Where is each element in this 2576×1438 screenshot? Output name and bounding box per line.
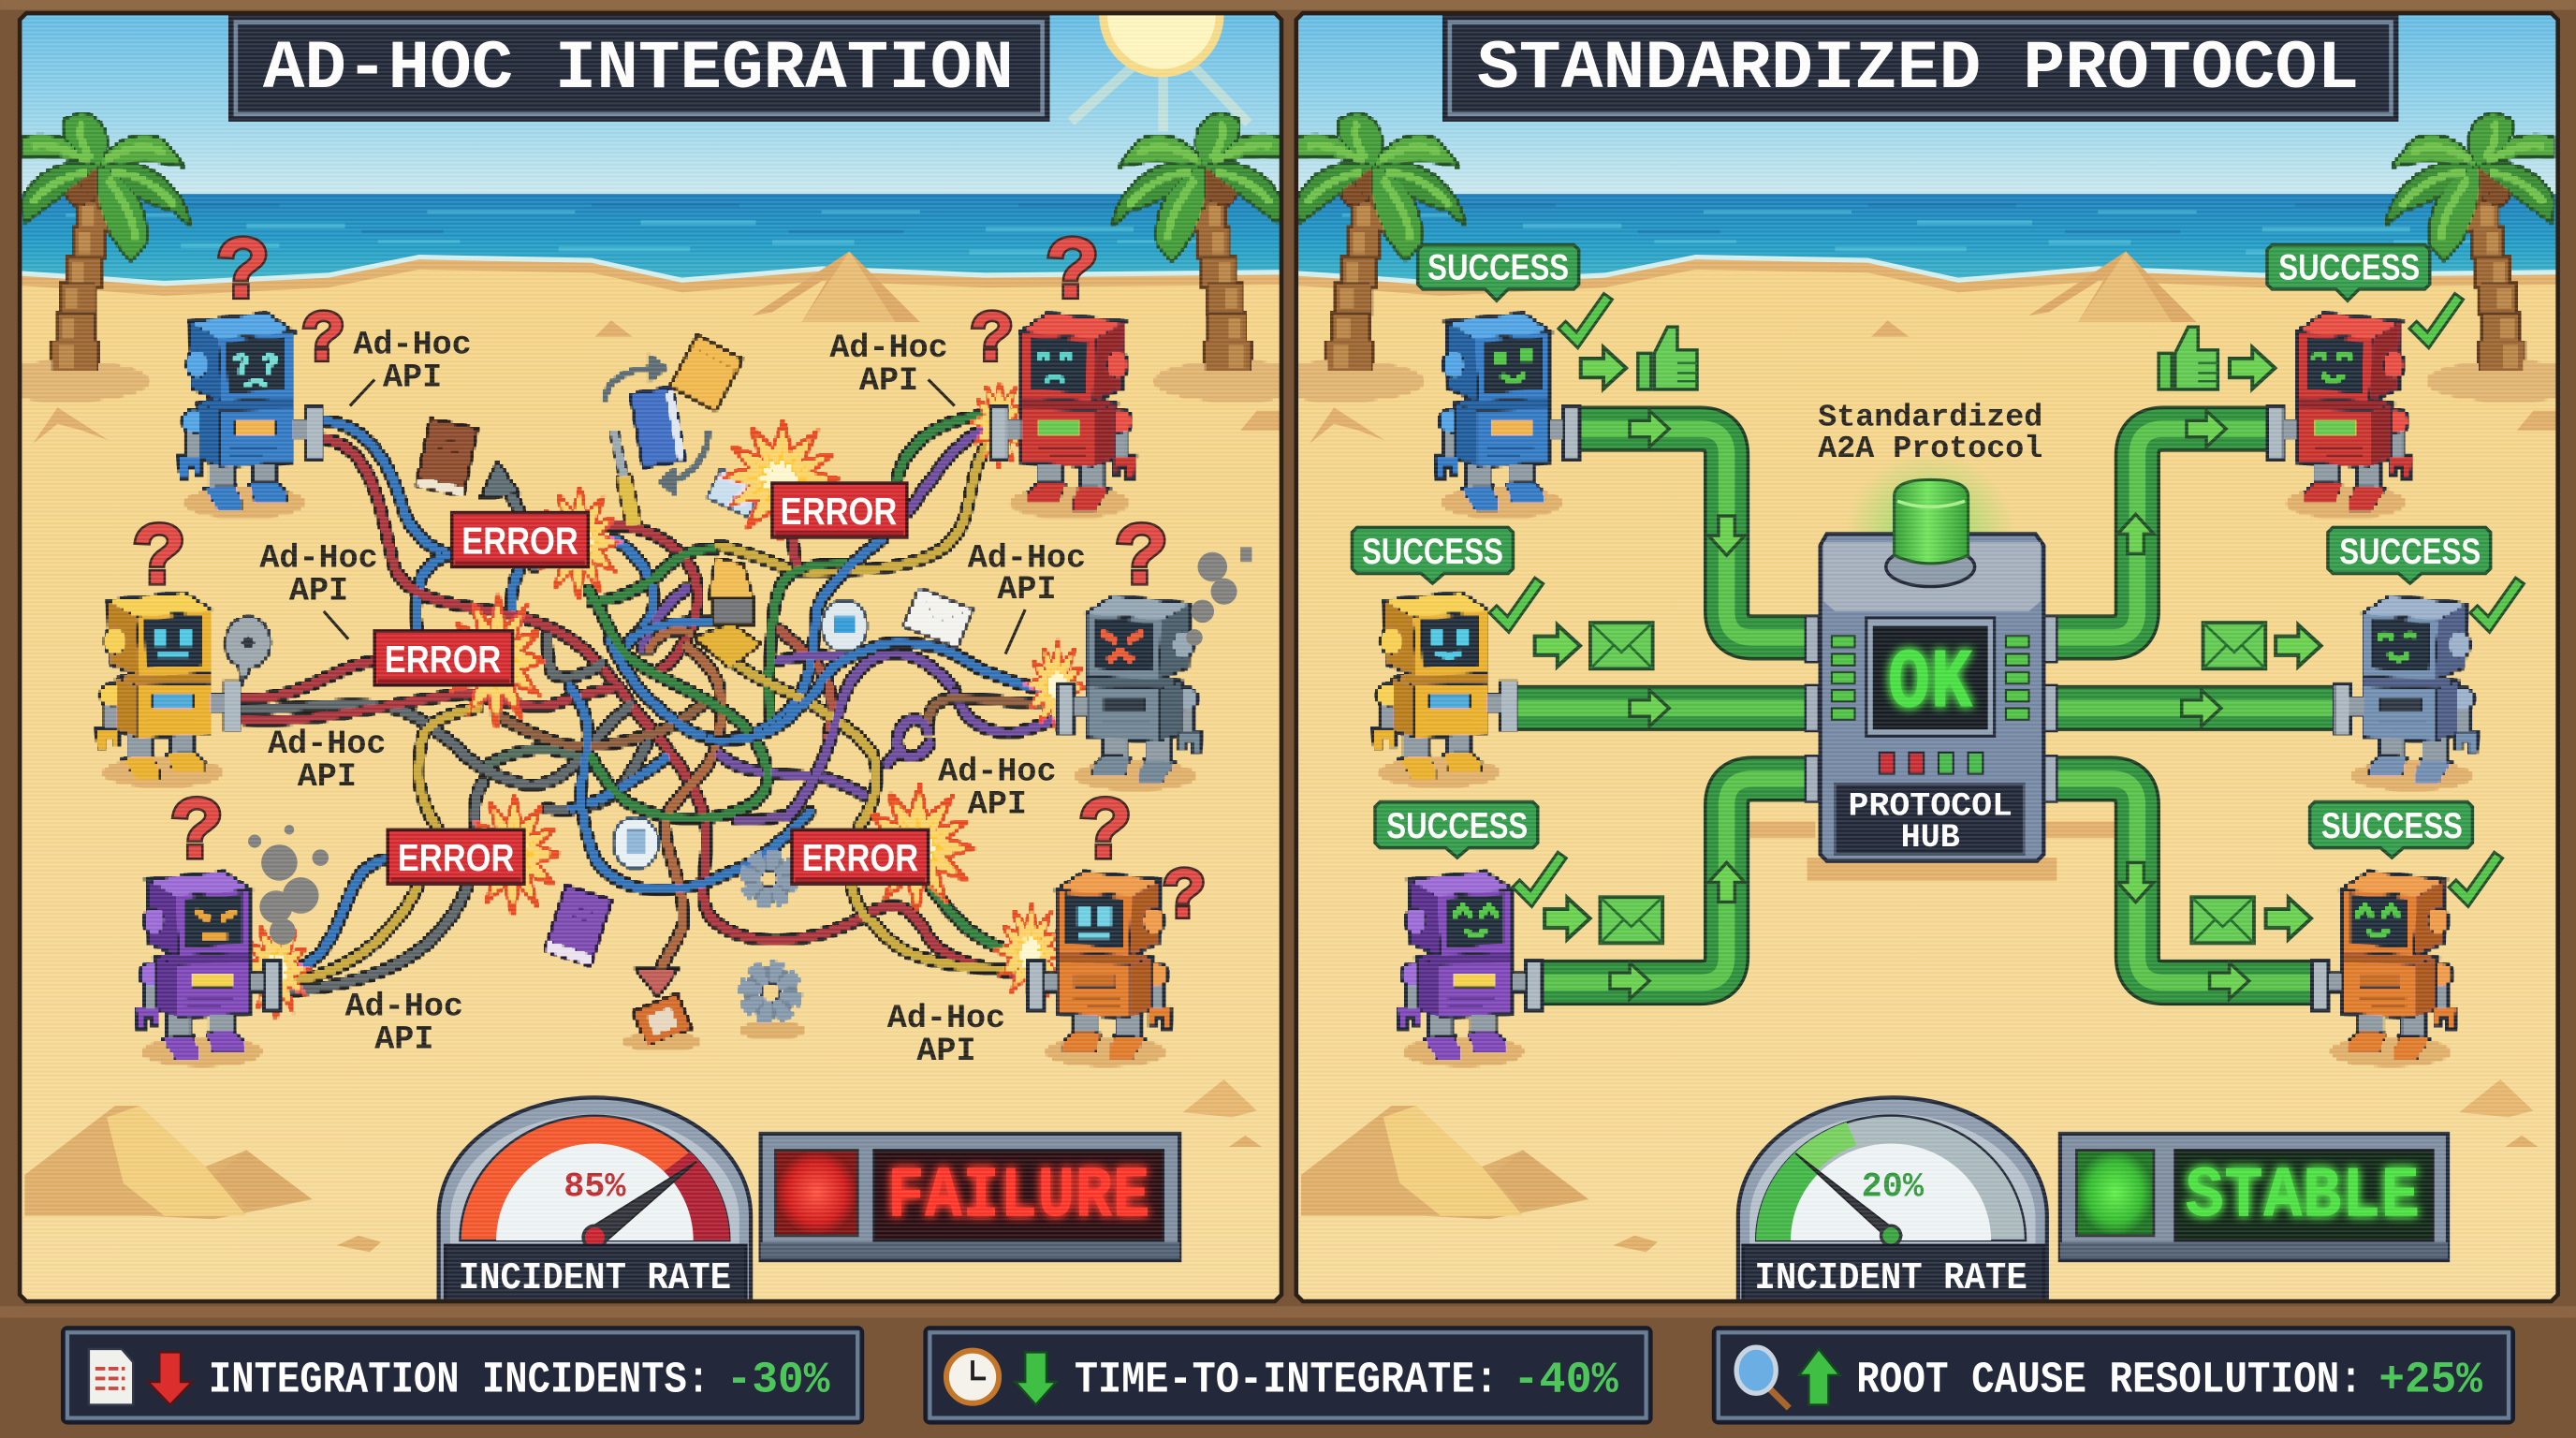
- icon: screwdriver: [607, 431, 640, 526]
- beach scene background: [1277, 0, 2576, 1438]
- beacon glow: [1845, 452, 2015, 616]
- explosion bursts: [243, 383, 1084, 1018]
- pipe: yellow robot to hub: [1508, 695, 1821, 721]
- kpi: time to integrate: TIME-TO-INTEGRATE:: [1075, 1357, 1499, 1406]
- kpi: root cause resolution: ROOT CAUSE RESOLUTION:: [1856, 1357, 2363, 1406]
- robot: grey angry and smoking: [1058, 596, 1201, 790]
- palm tree left: [1258, 113, 1464, 401]
- error badge 4: [388, 829, 524, 884]
- icon: red down arrow: [148, 1352, 192, 1405]
- question marks: ?: [216, 225, 270, 325]
- pipe: blue robot to hub: [1573, 429, 1821, 638]
- success bubble 3: [1352, 527, 1513, 583]
- status light: red: [775, 1151, 857, 1236]
- icon: light blue envelope: [709, 471, 760, 515]
- status panel: failure: FAILURE: [887, 1157, 1150, 1239]
- ad-hoc api labels: Ad-Hoc: [829, 330, 948, 367]
- icon: yellow gadget in tangle: [696, 559, 759, 668]
- pipe: red robot to hub: [2042, 429, 2278, 638]
- robots: ad-hoc side: [97, 314, 1201, 1066]
- question marks: ?: [1163, 858, 1207, 939]
- success bubble 5: SUCCESS: [1386, 806, 1528, 846]
- panel: standardized protocol: [1258, 0, 2576, 1438]
- ad-hoc api labels: Ad-Hoc: [887, 1000, 1005, 1037]
- gauge: incident rate 85%: 85%: [564, 1168, 626, 1208]
- icons: arrow and thumbs up, red robot: [2159, 327, 2275, 389]
- error badge 5: ERROR: [802, 836, 918, 879]
- status panel: stable: [2060, 1134, 2448, 1260]
- question marks: ?: [1115, 510, 1168, 610]
- robot: red sad: [992, 314, 1135, 518]
- hub label: PROTOCOL: [1848, 787, 2012, 825]
- kpi: root cause resolution: [1714, 1328, 2513, 1423]
- success bubble 3: SUCCESS: [1362, 532, 1503, 572]
- smoke: grey robot: [1186, 547, 1251, 646]
- error badge 1: [452, 513, 588, 566]
- robots: standardized side: [1373, 314, 2478, 1066]
- success bubble 4: [2328, 527, 2491, 583]
- icon: green up arrow: [1799, 1349, 1840, 1405]
- question marks: ?: [1046, 225, 1100, 325]
- wire bundle: [240, 414, 1060, 992]
- arrow: red wire head: [637, 969, 677, 996]
- status panel: stable: STABLE: [2185, 1157, 2420, 1239]
- robot: orange happy: [2313, 873, 2456, 1066]
- arrow: grey wire head: [481, 463, 518, 498]
- icon: broken orange image: [624, 995, 700, 1049]
- gauge: incident rate 20%: INCIDENT RATE: [1754, 1257, 2027, 1300]
- success bubble 5: [1375, 801, 1538, 858]
- kpi: integration incidents: [63, 1328, 862, 1423]
- robot: blue happy: [1436, 314, 1579, 518]
- gauge: incident rate 85%: [439, 1097, 751, 1301]
- title: standardized protocol: STANDARDIZED PROTOCOL: [1477, 31, 2359, 109]
- robot: yellow worried: [97, 593, 240, 786]
- icons: arrow and envelope, purple robot: [1544, 897, 1662, 943]
- error badge 4: ERROR: [398, 836, 514, 879]
- text: standardized a2a protocol: [1818, 401, 2042, 467]
- robot: blue confused: [179, 314, 322, 518]
- ad-hoc api labels: API: [997, 571, 1057, 609]
- robot: blue confused: ?: [233, 349, 250, 381]
- ad-hoc api labels: API: [298, 758, 357, 796]
- palm tree left: [0, 113, 189, 401]
- gauge: incident rate 20%: [1738, 1097, 2047, 1301]
- ad-hoc api labels: API: [374, 1021, 433, 1059]
- ad-hoc api labels: Ad-Hoc: [353, 326, 472, 363]
- panel outline right: [1296, 13, 2558, 1301]
- icon: clock: [946, 1351, 999, 1403]
- robot: grey happy: [2334, 596, 2478, 790]
- icon: blue book: [632, 388, 684, 466]
- ad-hoc api labels: API: [859, 362, 918, 400]
- checkmarks: [1497, 301, 2517, 899]
- success bubble 4: SUCCESS: [2339, 532, 2481, 572]
- icon: folder: [671, 337, 741, 409]
- question marks: ?: [302, 301, 345, 382]
- success bubble 1: [1418, 244, 1579, 301]
- robot: blue confused: ?: [261, 349, 278, 381]
- ad-hoc api labels: API: [289, 573, 348, 610]
- pipe flow arrows: [1610, 411, 2249, 999]
- success bubble 1: SUCCESS: [1427, 247, 1569, 287]
- status panel: failure: [761, 1134, 1179, 1260]
- kpi: integration incidents: INTEGRATION INCIDENTS:: [209, 1357, 710, 1406]
- smoke: purple robot: [248, 825, 329, 945]
- icons: arrow and thumbs up, blue robot: [1581, 327, 1697, 389]
- protocol hub: [1806, 452, 2056, 861]
- success bubble 2: SUCCESS: [2278, 247, 2420, 287]
- hub label: HUB: [1901, 819, 1960, 857]
- hub shadow: [1741, 822, 2119, 881]
- kpi: root cause resolution: +25%: [2378, 1357, 2482, 1406]
- icons: envelope and arrow, grey robot: [2203, 623, 2321, 668]
- ad-hoc api labels: Ad-Hoc: [345, 989, 463, 1026]
- ad-hoc api labels: Ad-Hoc: [968, 539, 1086, 577]
- question marks: ?: [971, 301, 1014, 382]
- icon: fallen cog: [741, 974, 803, 1038]
- ad-hoc api labels: [259, 326, 1086, 1070]
- status light: green: [2076, 1151, 2154, 1236]
- icon: purple book: [546, 887, 610, 965]
- icon: magnifier: [1736, 1347, 1789, 1408]
- title: ad-hoc integration: [230, 17, 1048, 120]
- gauge: incident rate 85%: INCIDENT RATE: [459, 1257, 731, 1300]
- robot: purple angry: [137, 873, 279, 1066]
- beach scene background: [22, 15, 1280, 1299]
- error badge 3: ERROR: [781, 490, 897, 533]
- arrows: circling motion: [605, 359, 708, 492]
- kpi: time to integrate: -40%: [1513, 1357, 1618, 1406]
- ad-hoc api labels: API: [916, 1033, 976, 1070]
- pipe: purple robot to hub: [1534, 779, 1821, 983]
- beacon: [1886, 479, 1975, 587]
- question marks: ?: [1079, 785, 1133, 885]
- error badge 1: ERROR: [461, 519, 578, 562]
- icon: cog in tangle: [752, 862, 786, 896]
- success bubble 6: SUCCESS: [2321, 806, 2463, 846]
- title: standardized protocol: [1444, 17, 2397, 120]
- kpi: integration incidents: -30%: [726, 1357, 830, 1406]
- side LEDs: [1832, 636, 2029, 720]
- error badge 5: [792, 829, 929, 884]
- gauge: incident rate 20%: 20%: [1862, 1168, 1925, 1208]
- title: ad-hoc integration: AD-HOC INTEGRATION: [263, 31, 1014, 109]
- robot: red happy: [2269, 314, 2411, 518]
- question marks: ?: [133, 510, 186, 610]
- robot: orange distressed: [1029, 873, 1171, 1066]
- icon: speech bubble with wrench: [227, 618, 270, 682]
- text: OK: OK: [1888, 637, 1973, 733]
- icons: envelope and arrow, orange robot: [2191, 897, 2311, 943]
- tangled wires and floating icons: [227, 337, 1084, 1049]
- icon: blue chat cog: [823, 601, 866, 651]
- text: standardized a2a protocol: Standardized: [1818, 401, 2042, 436]
- ad-hoc api labels: Ad-Hoc: [268, 726, 386, 763]
- question marks: ?: [170, 785, 224, 885]
- icon: white envelope: [905, 589, 972, 647]
- icon: green down arrow: [1016, 1352, 1057, 1405]
- kpi: time to integrate: [925, 1328, 1651, 1423]
- success bubble 2: [2267, 244, 2430, 301]
- icons: arrow and envelope, yellow robot: [1535, 623, 1653, 668]
- robot: yellow happy: [1373, 593, 1516, 786]
- icon: document bubble: [614, 818, 657, 868]
- ad-hoc api labels: Ad-Hoc: [938, 754, 1057, 791]
- text: standardized a2a protocol: A2A Protocol: [1818, 432, 2042, 467]
- icon: brown book: [417, 419, 476, 495]
- palm tree right: [2387, 113, 2576, 401]
- ad-hoc api labels: API: [383, 359, 442, 396]
- error badge 2: ERROR: [385, 638, 501, 681]
- sun: [1071, 0, 1249, 131]
- panel: ad-hoc integration: [22, 15, 1280, 1299]
- robot: purple happy: [1398, 873, 1541, 1066]
- ad-hoc api labels: Ad-Hoc: [259, 539, 378, 577]
- ad-hoc api labels: API: [968, 786, 1027, 824]
- success bubble 6: [2310, 801, 2472, 858]
- pipe: orange robot to hub: [2042, 779, 2320, 983]
- status lamps: [1880, 753, 1983, 774]
- icon: document: [89, 1349, 133, 1405]
- hub label: [1835, 784, 2024, 857]
- panel outline left: [20, 13, 1281, 1301]
- palm tree right: [1110, 112, 1280, 403]
- pipe: grey robot to hub: [2042, 695, 2341, 721]
- question marks: [133, 225, 1207, 939]
